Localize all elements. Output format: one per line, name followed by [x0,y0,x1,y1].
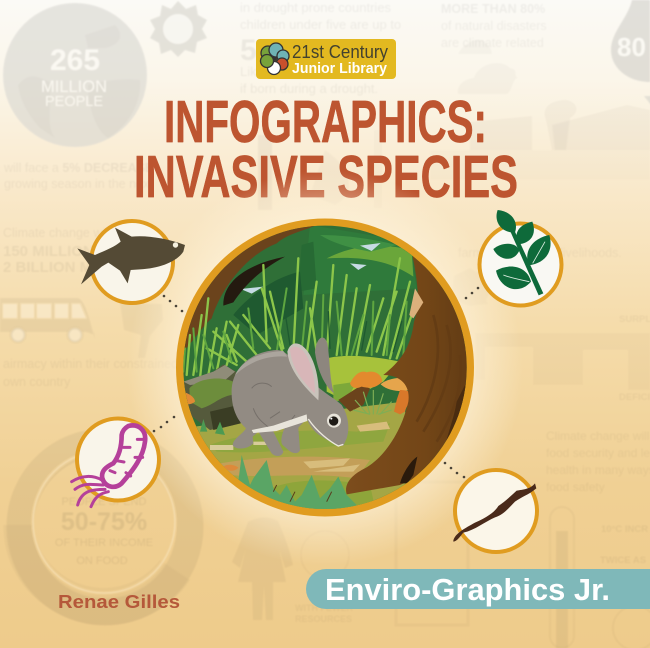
right tree trunk [346,252,477,494]
ghost globe: 265 [50,44,100,77]
ghost income ring: OF THEIR INCOME [55,537,153,549]
body [232,350,348,456]
ghost text: natural disasters [441,2,547,50]
tree arch [184,226,314,350]
logo text: 21st Century [292,41,389,62]
ghost bowl [613,606,650,648]
ghost resources icon and text: RESOURCES [295,614,352,624]
ghost text: natural disasters: are climate related [441,36,544,50]
ghost resources icon and text [295,531,353,624]
ghost text: decrease: growing season in the next [4,177,153,191]
ghost text: migration: 150 MILLION [3,243,94,260]
ghost globe: PEOPLE [45,94,103,110]
eye [327,414,341,428]
title [134,89,518,210]
mushrooms [338,372,414,414]
ghost calendar panel [396,482,468,625]
pine foliage [241,225,417,295]
ghost income ring: ON FOOD [76,555,128,567]
ghost text: food security: 10°C INCR [601,524,648,535]
ghost text: decrease [3,161,153,191]
ghost text: migration: airmacy within their constrained [3,357,178,371]
ghost water drop: 80 [617,32,646,62]
icon: leafy branch [493,210,551,295]
icon circle: stick insect [453,470,537,552]
title: INFOGRAPHICS: [164,89,487,155]
series name: Enviro-Graphics Jr. [325,572,610,607]
glow behind main circle [127,170,523,566]
ghost text: migration: 2 BILLION M [3,259,92,276]
ghost globe [3,3,147,147]
forest scene [180,222,477,515]
icon: bacterium [72,425,145,507]
ghost text: drought statistics: Likely [240,64,274,79]
ghost map [120,303,163,358]
ghost resources icon and text: WITH FEWER [295,603,353,613]
icon circle: bacteria [72,418,159,507]
ghost text: drought statistics: 5 [240,34,257,67]
ghost text: natural disasters: of natural disasters [441,19,547,33]
muzzle line [308,419,343,446]
ghost water drop [611,0,650,105]
ghost text: food security: food security and le [546,446,650,460]
fish eye [173,242,178,248]
ghost clouds [458,40,518,94]
ghost text: drought statistics: children under five are up to [240,17,401,32]
icon circle: fish [77,221,185,303]
moss mound [326,356,398,395]
ghost text: drought statistics: in drought prone countries [240,0,392,15]
ghost woman figure [232,517,293,620]
ghost text: food security [546,429,650,566]
ghost gear [452,268,490,306]
ghost text: drought statistics [240,0,401,96]
ghost thermometer [550,507,574,648]
ghost text: drought statistics: if born during a drought. [240,81,378,96]
ghost text: decrease: will face a 5% DECREASE [3,161,153,175]
dotted connectors [153,287,479,478]
ghost text: livelihoods: farm income [458,246,527,260]
ghost sun [150,1,207,57]
ghost food icon behind title [258,130,382,210]
ghost text: livelihoods: livelihoods. [560,246,622,260]
ghost text: migration [3,226,178,389]
icon: logo flower [260,43,289,74]
ghost village [430,100,650,180]
ghost text: food security: food safety [546,480,605,494]
ghost text: livelihoods [458,246,650,403]
tall grass [187,258,412,378]
near ear [287,343,319,400]
main circle illustration [176,218,477,516]
ground [196,402,415,506]
foreground grass [200,419,357,515]
neck band [252,414,307,433]
ghost income ring: PEOPLE SPEND [62,496,147,508]
ghost bus [0,298,95,342]
logo badge: Junior Library [292,61,387,77]
ghost income ring [3,442,190,625]
ghost income ring: 50-75% [61,508,147,536]
ghost text: food security: Climate change will [546,429,649,443]
ghost text: food security: TWICE AS [600,555,646,566]
far ear [315,337,334,393]
icon: twig [453,483,536,542]
ghost surplus and deficit chart [475,333,650,390]
series banner [306,569,650,609]
ghost globe: MILLION [41,78,107,96]
small bush [353,390,392,414]
ghost text: migration: Climate change will [3,226,111,240]
ghost text: natural disasters: MORE THAN 80% [441,2,545,16]
logo badge [256,39,396,79]
rabbit [232,337,348,456]
ghost text: migration: own country [3,375,71,389]
icon circle: leaves [480,210,562,306]
icon: fish [77,228,185,284]
mossy rock [180,364,241,430]
author name: Renae Gilles [58,591,180,612]
